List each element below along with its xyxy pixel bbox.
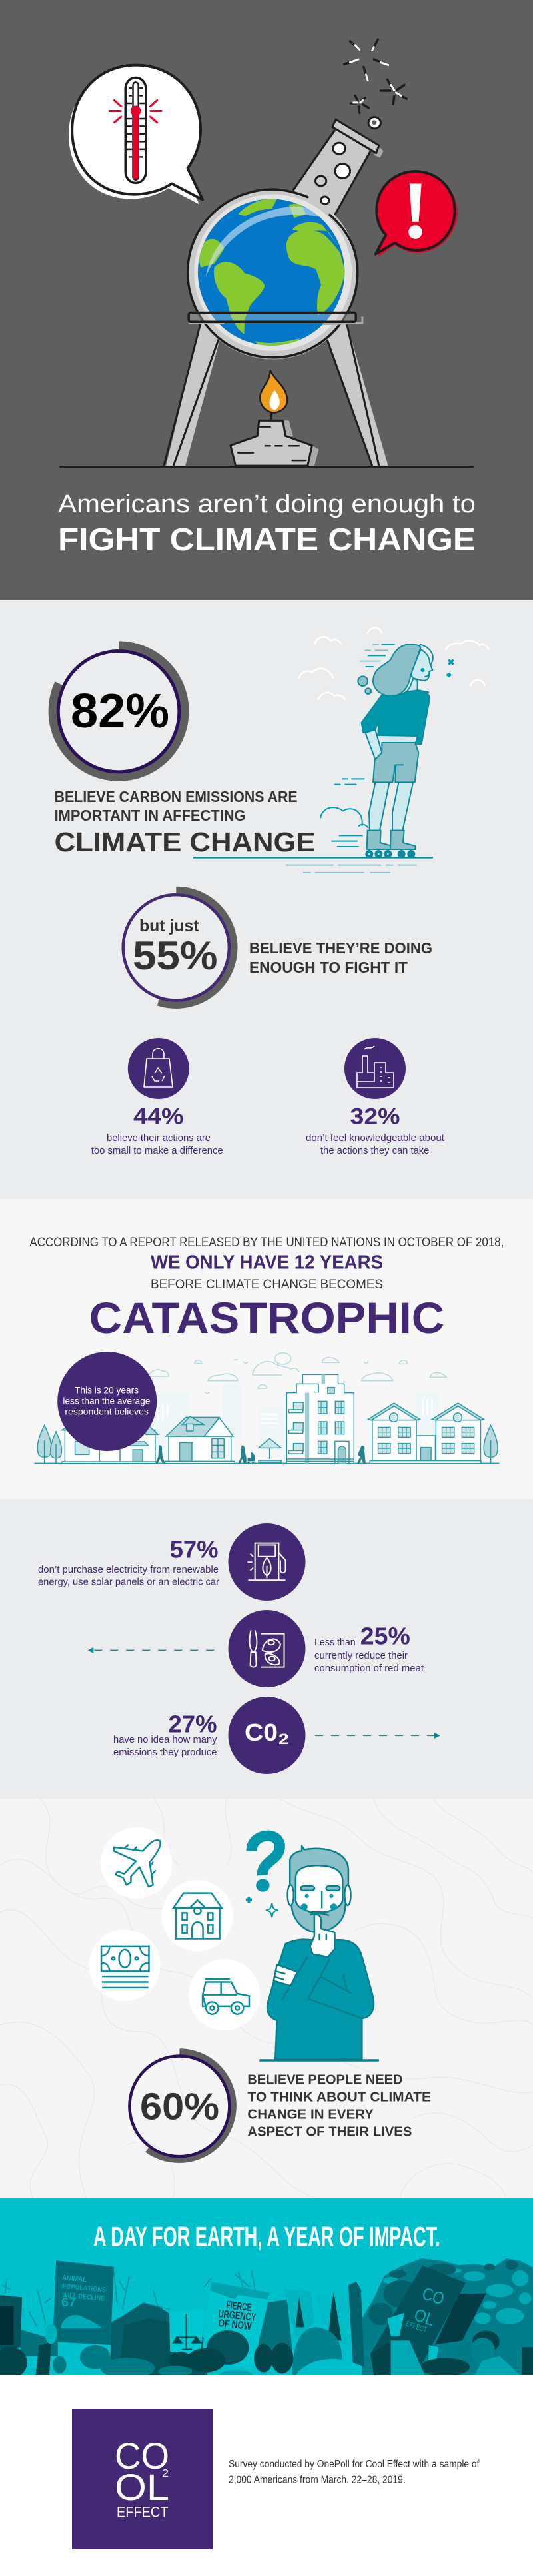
panel: think about climate: [0, 1799, 533, 2198]
panel: behaviors: [0, 1499, 533, 1799]
cool effect sign: [370, 2266, 466, 2365]
title: FIGHT CLIMATE CHANGE: [58, 522, 476, 558]
panel: hero: [0, 0, 533, 600]
arrow: right: [315, 1733, 440, 1739]
tall building: [286, 1374, 354, 1464]
heading: [29, 1236, 504, 1342]
stat: 32% not knowledgeable: 32%: [350, 1104, 400, 1130]
photo: protest crowd with signs: EFFECT: [405, 2320, 428, 2334]
stat: 27%: have no idea how many: [113, 1734, 217, 1745]
callout: 20 years less: This is 20 years: [75, 1386, 139, 1396]
stat: 27%: 27%: [168, 1711, 217, 1738]
title: Americans aren’t doing enough to: [58, 490, 476, 518]
heading: WE ONLY HAVE 12 YEARS: [151, 1252, 383, 1274]
background trees: [362, 2258, 533, 2375]
photo: protest crowd with signs: FIERCE: [226, 2300, 252, 2314]
logo: Cool Effect: EFFECT: [117, 2503, 168, 2520]
stat: 57%: 57%: [170, 1535, 219, 1563]
title: [58, 490, 476, 558]
back sign: [435, 2294, 486, 2344]
icon: plane: [101, 1827, 172, 1899]
text: carbon emissions: CLIMATE CHANGE: [55, 827, 316, 857]
left sign: [0, 2295, 22, 2350]
text: carbon emissions: IMPORTANT IN AFFECTING: [55, 807, 246, 824]
stat: 44% too small: believe their actions are: [107, 1132, 211, 1144]
photo: protest crowd with signs: URGENCY: [218, 2308, 257, 2324]
crowd: [292, 2327, 346, 2375]
icon: car: [189, 1959, 260, 2030]
umbrella and stall: [259, 1438, 281, 1448]
photo: protest crowd with signs: WILL DECLINE: [62, 2291, 105, 2303]
stat: 25%: Less than: [314, 1637, 356, 1648]
stat: but just 55%: [133, 917, 217, 978]
icon: house: [161, 1880, 233, 1952]
text: think about climate: ASPECT OF THEIR LIVES: [247, 2125, 412, 2140]
text: doing enough: ENOUGH TO FIGHT IT: [249, 959, 408, 976]
icon: exclamation speech bubble: [376, 171, 458, 257]
twin houses: [372, 1420, 416, 1461]
arrow: left: [88, 1647, 214, 1653]
stat: but just 55%: 55%: [133, 933, 217, 978]
callout: 20 years less: [57, 1352, 157, 1451]
legs of stand: [164, 323, 388, 466]
panel: carbon emissions beliefs: [0, 600, 533, 1199]
illustration: town: [34, 1353, 499, 1464]
text: survey source: 2,000 Americans from March. 22–28, 2019.: [229, 2475, 406, 2486]
donut: 60%: [129, 2052, 233, 2159]
photo: protest crowd with signs: POPULATIONS: [62, 2282, 107, 2294]
logo: Cool Effect: OL: [115, 2466, 169, 2508]
logo: Cool Effect: CO: [115, 2435, 169, 2477]
photo: protest crowd with signs: [0, 2258, 533, 2379]
stat: 27%: emissions they produce: [113, 1747, 217, 1758]
sparks: [344, 39, 406, 113]
stat: 44% too small: too small to make a difference: [91, 1145, 223, 1156]
flask neck: [292, 117, 384, 216]
icon: thermometer speech bubble: [69, 65, 203, 205]
text: think about climate: [247, 2073, 431, 2140]
photo: protest crowd with signs: OF NOW: [218, 2318, 253, 2332]
photo: protest crowd with signs: OL: [412, 2304, 437, 2330]
burner and flame: [61, 370, 473, 467]
stat: 32% not knowledgeable: don’t feel knowledgeable about: [306, 1132, 445, 1144]
animal sign: [53, 2260, 114, 2345]
stat: 82%: 82%: [71, 685, 169, 738]
globe: [188, 189, 362, 360]
icon: meat and knife: [228, 1610, 305, 1687]
text: think about climate: CHANGE IN EVERY: [247, 2108, 374, 2122]
heading: BEFORE CLIMATE CHANGE BECOMES: [151, 1278, 383, 1292]
stat: 25%: consumption of red meat: [314, 1663, 424, 1674]
text: doing enough: BELIEVE THEY’RE DOING: [249, 939, 432, 957]
text: think about climate: BELIEVE PEOPLE NEED: [247, 2073, 402, 2088]
stat: 27%: [113, 1711, 217, 1758]
house 2: [169, 1436, 231, 1462]
text: doing enough: [249, 939, 432, 976]
tree signs: [284, 2289, 314, 2338]
stat: but just 55%: but just: [139, 917, 199, 935]
heading: CATASTROPHIC: [89, 1293, 444, 1342]
illustration: thinking man: [246, 1835, 379, 2060]
stat: 32% not knowledgeable: the actions they can take: [320, 1145, 429, 1156]
scales sign: [169, 2313, 203, 2354]
text: carbon emissions: BELIEVE CARBON EMISSIONS ARE: [55, 788, 298, 805]
panel: catastrophic: [0, 1199, 533, 1499]
photo: protest crowd with signs: ANIMAL: [62, 2274, 87, 2284]
photo: protest crowd with signs: 67: [61, 2296, 76, 2309]
stat: 25%: [314, 1623, 424, 1674]
stat: 44% too small: [91, 1038, 223, 1156]
stat: 25%: 25%: [360, 1623, 410, 1650]
urgency sign: [203, 2302, 268, 2349]
photo: protest crowd with signs: CO: [420, 2283, 447, 2309]
donut: 82%: [53, 645, 185, 777]
stat: 57%: [38, 1535, 219, 1588]
stat: 32% not knowledgeable: [306, 1038, 445, 1156]
logo: Cool Effect: 2: [162, 2468, 169, 2479]
stat: 60%: 60%: [140, 2085, 219, 2128]
callout: 20 years less: less than the average: [63, 1396, 150, 1406]
trees: [37, 1425, 51, 1463]
panel: a day for earth: [0, 2198, 533, 2379]
stat: 44% too small: 44%: [133, 1104, 184, 1130]
text: survey source: [229, 2459, 480, 2486]
icon: CO2: C0: [245, 1719, 278, 1746]
donut: 55%: [123, 890, 234, 1005]
icon: money: [89, 1930, 160, 2001]
stat: 25%: currently reduce their: [314, 1650, 408, 1661]
icon: CO2: 2: [278, 1731, 289, 1747]
icon: fuel pump with leaf: [228, 1523, 305, 1601]
panel: footer: [0, 2375, 533, 2576]
text: survey source: Survey conducted by OnePoll for Cool Effect with a sample of: [229, 2459, 480, 2470]
callout: 20 years less: respondent believes: [65, 1407, 149, 1417]
wispy branches: [2, 2270, 255, 2327]
text: think about climate: TO THINK ABOUT CLIMATE: [247, 2090, 431, 2105]
stat: 57%: energy, use solar panels or an electric car: [38, 1577, 219, 1588]
icon: CO2: [228, 1697, 305, 1774]
stat: 57%: don’t purchase electricity from renewable: [38, 1564, 219, 1575]
logo: Cool Effect: [72, 2409, 213, 2549]
text: carbon emissions: [55, 788, 316, 857]
illustration: woman on roller skates: [193, 628, 488, 873]
illustration: globe flask on burner: [61, 39, 473, 467]
